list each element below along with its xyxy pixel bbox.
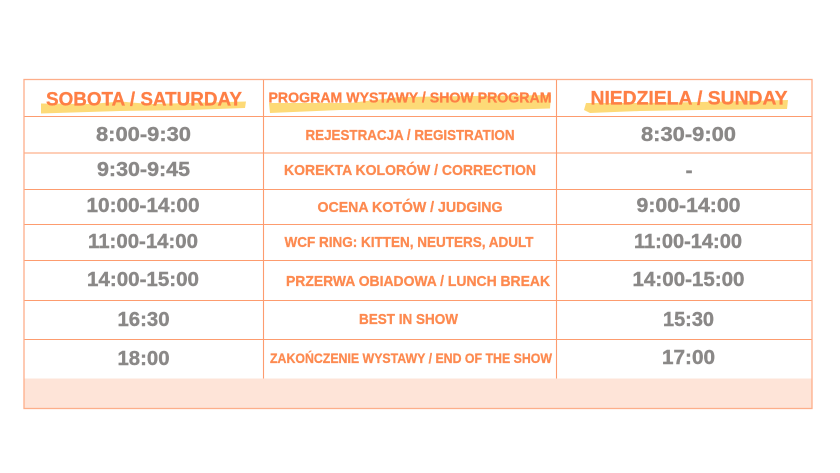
sunday times: 8:30-9:00 (641, 123, 736, 146)
program items: KOREKTA KOLORÓW / CORRECTION (284, 161, 536, 179)
highlight: sunday (584, 100, 788, 113)
table outer border (24, 80, 812, 408)
program items: OCENA KOTÓW / JUDGING (318, 198, 502, 216)
footer band (24, 378, 812, 408)
saturday times: 9:30-9:45 (97, 158, 190, 181)
sunday times: 14:00-15:00 (632, 268, 744, 291)
highlight: saturday (41, 102, 246, 114)
saturday times: 18:00 (118, 347, 170, 370)
saturday times: 10:00-14:00 (86, 194, 200, 217)
program items: REJESTRACJA / REGISTRATION (306, 128, 514, 144)
saturday times: 16:30 (118, 308, 170, 331)
heading: saturday: SOBOTA / SATURDAY (46, 90, 242, 110)
program items (270, 128, 553, 366)
sunday times (632, 123, 744, 369)
sunday times: 15:30 (663, 308, 714, 331)
program items: ZAKOŃCZENIE WYSTAWY / END OF THE SHOW (270, 350, 553, 366)
program items: WCF RING: KITTEN, NEUTERS, ADULT (284, 235, 534, 251)
heading: sunday: NIEDZIELA / SUNDAY (590, 88, 788, 110)
saturday times (86, 123, 200, 370)
sunday times: - (686, 159, 692, 182)
program items: BEST IN SHOW (359, 312, 458, 328)
sunday times: 9:00-14:00 (636, 194, 740, 217)
highlight: program (269, 95, 551, 113)
sunday times: 17:00 (662, 346, 715, 369)
saturday times: 14:00-15:00 (87, 268, 199, 291)
sunday times: 11:00-14:00 (634, 230, 742, 253)
saturday times: 11:00-14:00 (88, 230, 198, 253)
heading: show program: PROGRAM WYSTAWY / SHOW PROGRAM (268, 90, 552, 106)
saturday times: 8:00-9:30 (96, 123, 191, 146)
program items: PRZERWA OBIADOWA / LUNCH BREAK (286, 274, 551, 290)
